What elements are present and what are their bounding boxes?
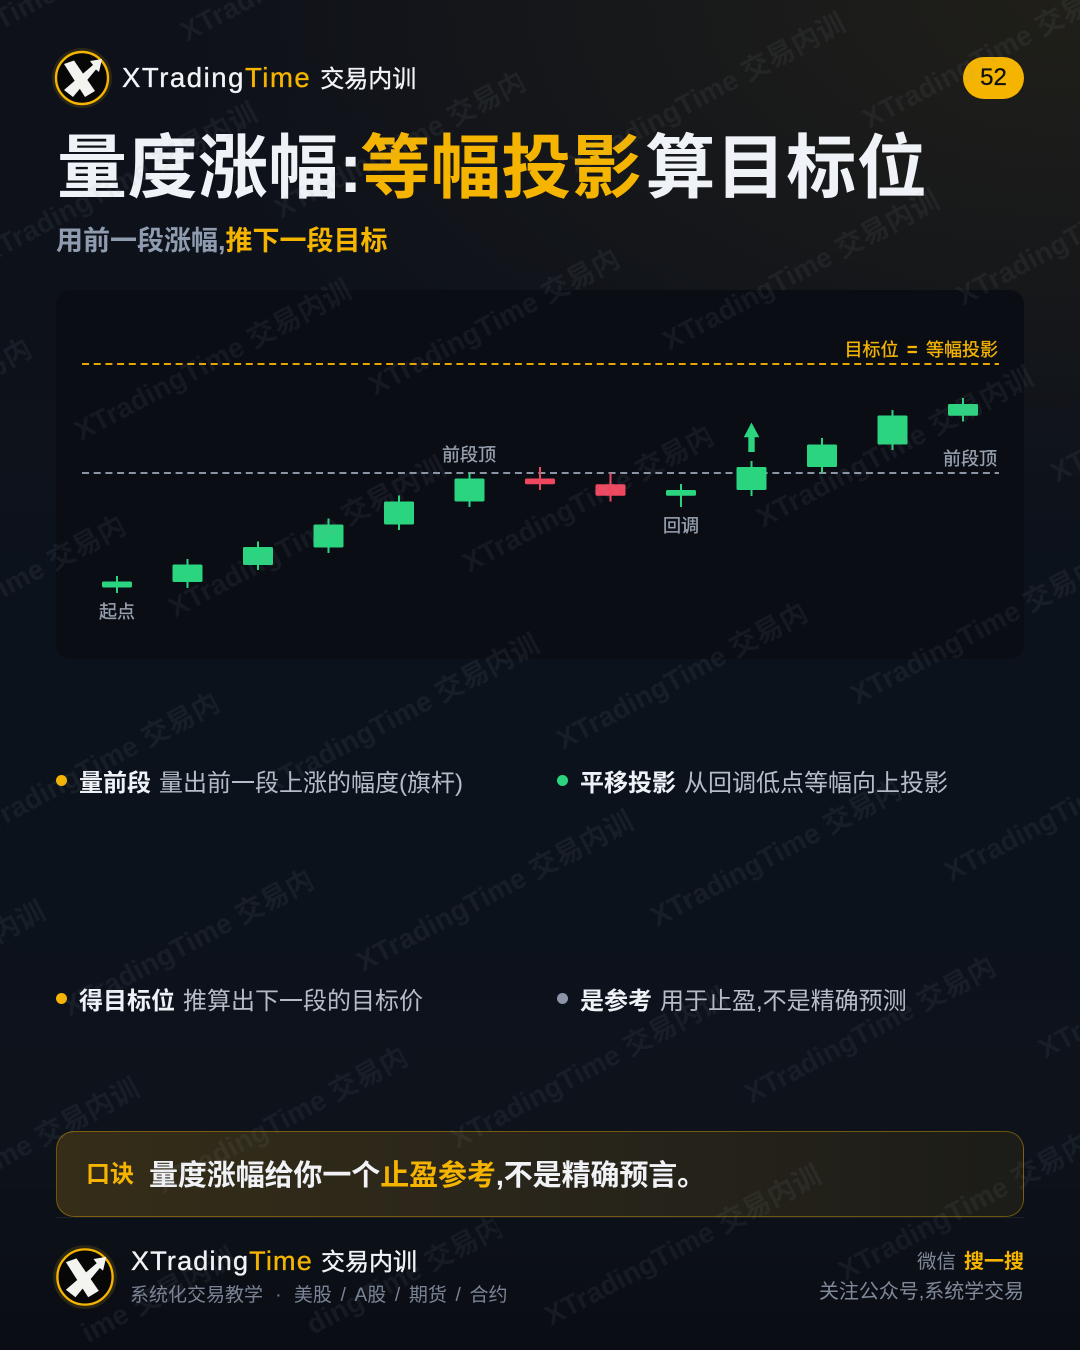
watermark layer: dingTime 交易内训 (301, 1197, 534, 1340)
watermark layer: XTradingTime 交易内训 (69, 274, 356, 446)
label: pullback: 回调 (663, 516, 699, 536)
footer wechat search (819, 1250, 1024, 1303)
wechat line: 微信 搜一搜 (917, 1251, 1024, 1273)
label: target level: 目标位 = 等幅投影 (844, 340, 998, 360)
watermark layer: XTradingTime 交易内训 (563, 7, 850, 179)
footer brand (53, 1245, 507, 1309)
panel: candlestick chart (56, 290, 1024, 659)
target level dashed line (82, 363, 999, 365)
callout label: 口诀 (86, 1161, 134, 1188)
page number badge (963, 57, 1024, 99)
brand name: XTradingTime 交易内训 (122, 62, 416, 93)
bullet: measure previous leg: 量前段 量出前一段上涨的幅度(旗杆) (79, 770, 463, 797)
arrow: up projection (744, 422, 759, 452)
watermark layer: XTradingTime 交易内训 (269, 52, 556, 224)
page number badge: 52 (980, 64, 1007, 91)
watermark layer: XTradingTime 交易内训 (645, 760, 932, 932)
watermark layer: XTradingTime 交易内训 (751, 361, 1038, 533)
footer brand name: XTradingTime 交易内训 (131, 1246, 417, 1276)
bullet: shift projection: 平移投影 从回调低点等幅向上投影 (580, 770, 948, 797)
label: previous top left: 前段顶 (442, 445, 496, 465)
label: start point: 起点 (99, 602, 135, 622)
watermark layer: XTradingTime 交易内训 (363, 229, 650, 401)
previous top dashed line (82, 472, 999, 474)
bullet: get target: 得目标位 推算出下一段的目标价 (79, 988, 423, 1015)
watermark layer: XTradingTime 交易内训 (457, 406, 744, 578)
watermark layer: XTradingTime 交易内训 (445, 982, 732, 1154)
icon: footer logo (53, 1245, 117, 1309)
watermark layer: XTradingTime 交易内训 (657, 184, 944, 356)
watermark layer: XTradingTime 交易内训 (539, 1159, 826, 1331)
follow line: 关注公众号,系统学交易 (819, 1281, 1024, 1303)
label: previous top right: 前段顶 (943, 449, 997, 469)
watermark layer: XTradingTime 交易内训 (551, 583, 838, 755)
watermark layer: XTradingTime 交易内训 (57, 850, 344, 1022)
red candles (525, 467, 626, 502)
watermark layer: XTradingTime 交易内训 (151, 1027, 438, 1199)
title: 量度涨幅:等幅投影算目标位 (57, 129, 927, 207)
callout text: 量度涨幅给你一个止盈参考,不是精确预言。 (149, 1160, 706, 1192)
green candles (102, 398, 978, 593)
callout: mnemonic (56, 1131, 1024, 1217)
header brand (52, 48, 416, 108)
watermark layer: XTradingTime 交易内训 (163, 451, 450, 623)
footer tagline: 系统化交易教学 · 美股 / A股 / 期货 / 合约 (130, 1285, 507, 1306)
watermark layer: XTradingTime 交易内训 (257, 628, 544, 800)
chart: candles and levels (82, 363, 999, 593)
subtitle: 用前一段涨幅,推下一段目标 (56, 226, 388, 256)
watermark layer: XTradingTime 交易内训 (351, 805, 638, 977)
watermark layer: ime 交易内训 (76, 1241, 241, 1348)
bullet: reference only: 是参考 用于止盈,不是精确预测 (580, 988, 907, 1015)
icon: XTradingTime logo (52, 48, 112, 108)
watermark layer: XTradingTime 交易内训 (739, 937, 1026, 1109)
